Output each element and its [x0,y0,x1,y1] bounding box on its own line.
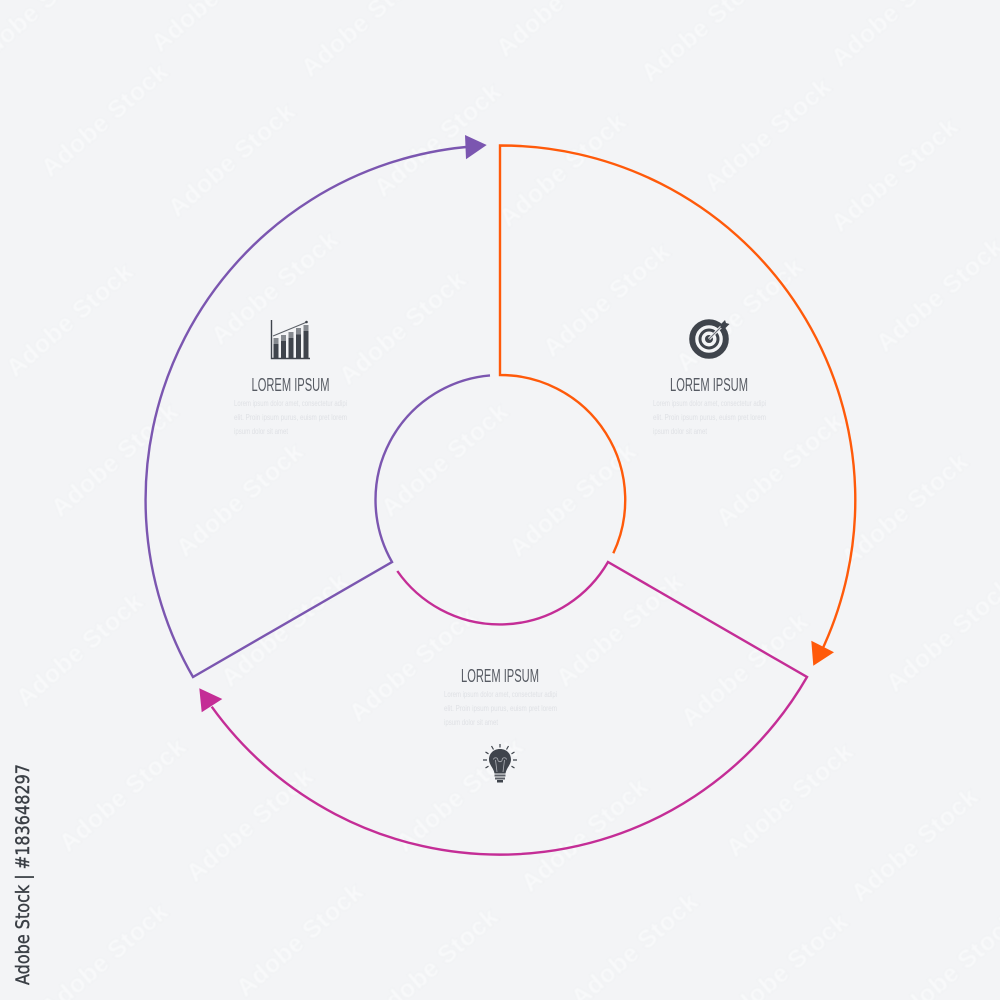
stock watermark pattern: Adobe Stock [711,407,849,532]
stock watermark pattern: Adobe Stock [671,252,809,377]
stock watermark pattern: Adobe Stock [391,732,529,857]
magenta segment outline with arrow [199,562,807,855]
text block: left panel: elit. Proin ipsum purus, euism pret lorem [234,412,347,422]
arrowhead: purple [465,135,487,159]
heading: bottom panel: LOREM IPSUM [461,666,539,686]
text block: right panel: elit. Proin ipsum purus, euism pret lorem [653,412,766,422]
stock watermark pattern: Adobe Stock [171,437,309,562]
stock watermark pattern: Adobe Stock [516,772,654,897]
text block: bottom panel [444,689,557,727]
stock watermark pattern: Adobe Stock [344,602,482,727]
stock watermark pattern: Adobe Stock [846,782,984,907]
stock watermark pattern: Adobe Stock [163,97,301,222]
heading: left panel: LOREM IPSUM [252,375,330,395]
arrowhead: magenta [199,688,222,712]
stock watermark pattern: Adobe Stock [721,737,859,862]
stock watermark pattern: Adobe Stock [334,265,472,390]
stock watermark pattern: Adobe Stock [46,397,184,522]
stock watermark pattern: Adobe Stock [494,107,632,232]
orange segment outline with arrow [500,145,855,666]
text block: bottom panel: Lorem ipsum dolor amet, consectetur adipi [444,689,557,699]
arrowhead: orange [811,641,834,666]
stock watermark pattern: Adobe Stock [1,257,139,382]
stock watermark pattern: Adobe Stock [369,77,507,202]
stock watermark pattern: Adobe Stock [538,237,676,362]
stock watermark pattern: Adobe Stock [699,72,837,197]
text block: left panel: Lorem ipsum dolor amet, consectetur adipi [234,398,347,408]
icon: target with dart [692,320,730,356]
stock watermark pattern: Adobe Stock [551,567,689,692]
stock watermark pattern: Adobe Stock [836,447,974,572]
stock watermark pattern: Adobe Stock [376,397,514,522]
stock watermark pattern: Adobe Stock [54,732,192,857]
text block: right panel: Lorem ipsum dolor amet, consectetur adipi [653,398,766,408]
stock id caption: Adobe Stock | #183648297 [12,764,34,985]
text block: left panel: ipsum dolor sit amet [234,426,288,436]
text block: right panel [653,398,766,436]
heading: right panel: LOREM IPSUM [670,375,748,395]
stock watermark pattern: Adobe Stock [36,57,174,182]
purple segment outline with arrow [146,135,490,677]
stock watermark pattern: Adobe Stock [504,437,642,562]
text block: bottom panel: ipsum dolor sit amet [444,717,498,727]
stock watermark pattern: Adobe Stock [231,877,369,1000]
text block: left panel [234,398,347,436]
stock watermark pattern: Adobe Stock [676,607,814,732]
stock watermark pattern: Adobe Stock [216,567,354,692]
text block: right panel: ipsum dolor sit amet [653,426,707,436]
icon: light bulb [483,744,517,782]
stock watermark pattern: Adobe Stock [11,587,149,712]
stock watermark pattern: Adobe Stock [181,762,319,887]
stock watermark pattern: Adobe Stock [206,225,344,350]
icon: bar chart [272,320,310,358]
stock watermark pattern: Adobe Stock [826,112,964,237]
text block: bottom panel: elit. Proin ipsum purus, euism pret lorem [444,703,557,713]
